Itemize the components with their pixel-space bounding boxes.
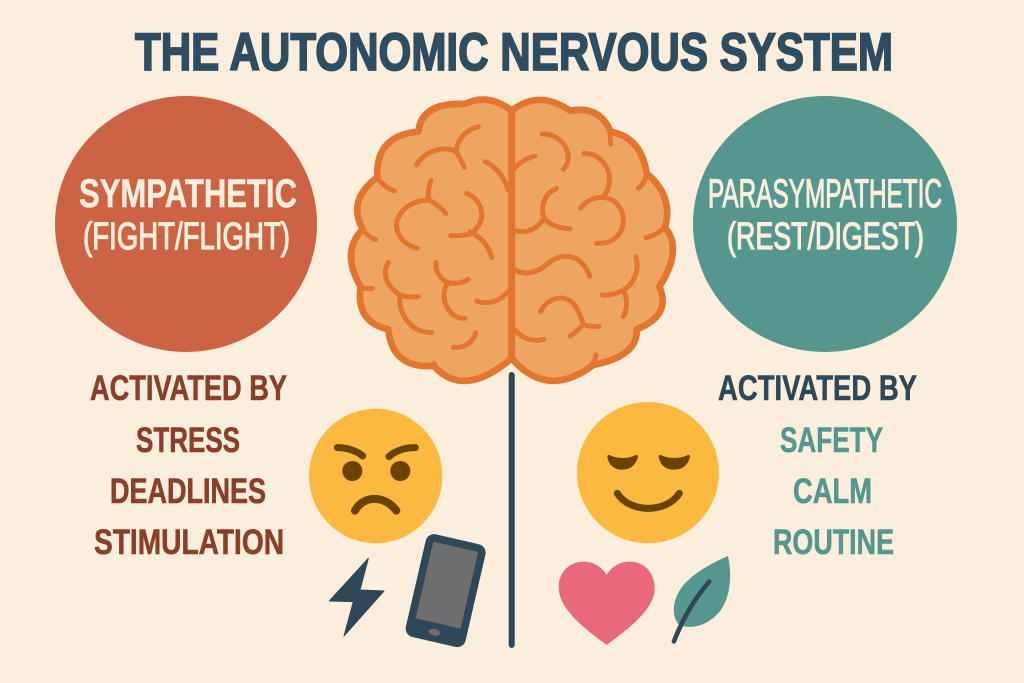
icon: heart [559,562,655,645]
list: parasympathetic triggers: SAFETY [780,421,883,460]
sympathetic subheading: (FIGHT/FLIGHT) [83,216,290,258]
list: parasympathetic triggers: CALM [793,472,872,511]
icon: angry face [309,409,442,543]
list: sympathetic triggers: ACTIVATED BY [90,369,287,408]
panel: parasympathetic circle [693,96,957,352]
left folds [417,127,478,165]
icon: leaf [674,556,730,641]
icon: smartphone [404,532,487,649]
parasympathetic subheading: (REST/DIGEST) [727,216,924,258]
list: sympathetic triggers: STRESS [136,421,240,460]
list: sympathetic triggers [90,369,287,562]
list: parasympathetic triggers: ACTIVATED BY [718,369,917,408]
panel: sympathetic circle [55,96,317,352]
icon: lightning bolt [329,558,384,636]
icon: brain [351,100,673,381]
list: sympathetic triggers: DEADLINES [110,472,266,511]
divider line [509,375,515,645]
list: sympathetic triggers: STIMULATION [94,523,284,562]
right folds [515,156,535,168]
sympathetic heading: SYMPATHETIC [79,172,297,216]
icon: calm face [577,402,719,543]
list: parasympathetic triggers: ROUTINE [773,523,894,562]
list: parasympathetic triggers [718,369,917,562]
